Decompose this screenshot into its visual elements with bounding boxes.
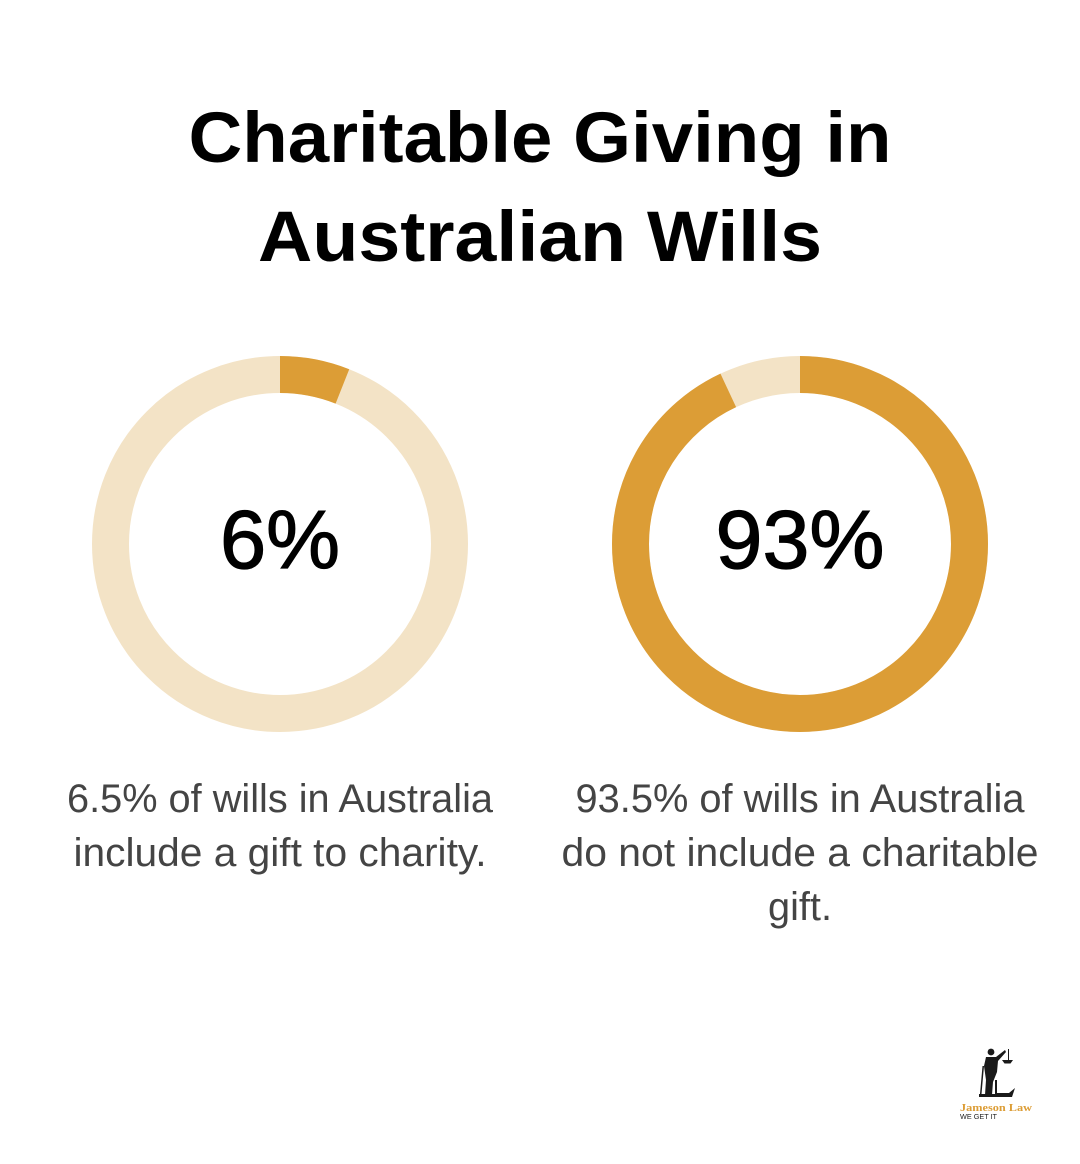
panel: 93 percent: [562, 374, 1038, 929]
title: Australian Wills: [258, 198, 822, 277]
description: 93.5% of wills: 93.5% of wills in Australia: [576, 777, 1025, 821]
logo tagline: WE GET IT: [960, 1114, 998, 1121]
panel: 6 percent: [67, 374, 494, 875]
logo name: Jameson Law: [960, 1103, 1032, 1114]
description: 93.5% of wills: do not include a charitable: [562, 831, 1038, 875]
description: 93.5% of wills: gift.: [768, 885, 832, 929]
donut chart: 93%: [630, 374, 970, 714]
icon: lady justice: [979, 1049, 1015, 1097]
description: 93.5% of wills: [562, 777, 1038, 929]
logo: Jameson Law: [960, 1049, 1032, 1121]
description: 6.5% of wills: include a gift to charity.: [74, 831, 487, 875]
value: 6%: 6%: [220, 493, 340, 586]
title: [188, 99, 892, 277]
donut chart: 6%: [110, 374, 450, 714]
title: Charitable Giving in: [188, 99, 892, 178]
description: 6.5% of wills: [67, 777, 494, 875]
value: 93%: 93%: [716, 493, 884, 586]
description: 6.5% of wills: 6.5% of wills in Australia: [67, 777, 494, 821]
